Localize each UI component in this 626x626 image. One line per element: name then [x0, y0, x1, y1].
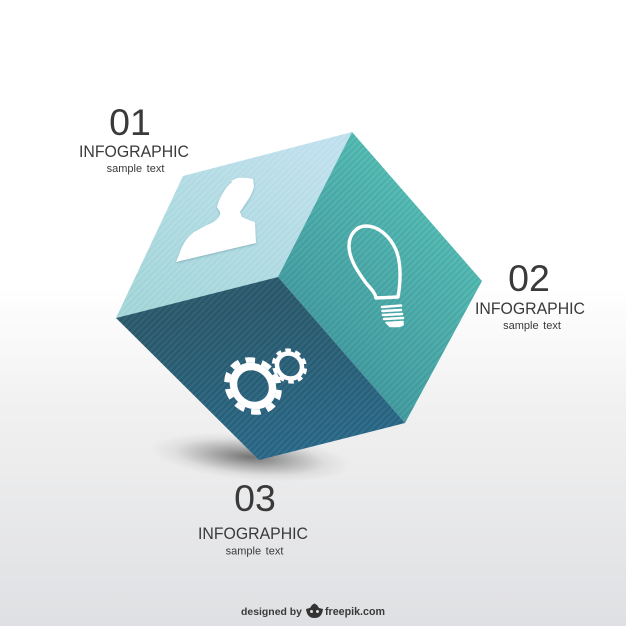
icon: large gear	[216, 349, 290, 423]
icon: light bulb	[349, 226, 403, 326]
label 01: sample text	[107, 163, 164, 175]
credit: freepik: freepik.com	[325, 606, 385, 618]
label 01: 01	[109, 101, 151, 143]
cube shadow	[148, 425, 352, 489]
credit: freepik: designed by	[241, 606, 302, 618]
credit: freepik	[241, 604, 385, 618]
icon: small gear	[267, 344, 312, 388]
label 02: sample text	[503, 320, 561, 332]
label 01: INFOGRAPHIC	[79, 143, 189, 161]
icon: gears	[216, 344, 312, 423]
label 02	[475, 257, 585, 332]
label 03	[198, 477, 308, 558]
icon: freepik logo	[306, 604, 323, 618]
panel: right face	[278, 132, 482, 423]
icon: person	[176, 178, 256, 262]
panel: bottom face	[116, 277, 405, 460]
label 03: INFOGRAPHIC	[198, 525, 308, 543]
label 03: sample text	[226, 546, 283, 558]
label 02: INFOGRAPHIC	[475, 300, 585, 318]
label 03: 03	[234, 477, 276, 519]
label 02: 02	[508, 257, 550, 299]
label 01	[79, 101, 189, 175]
panel: top face	[116, 132, 352, 318]
